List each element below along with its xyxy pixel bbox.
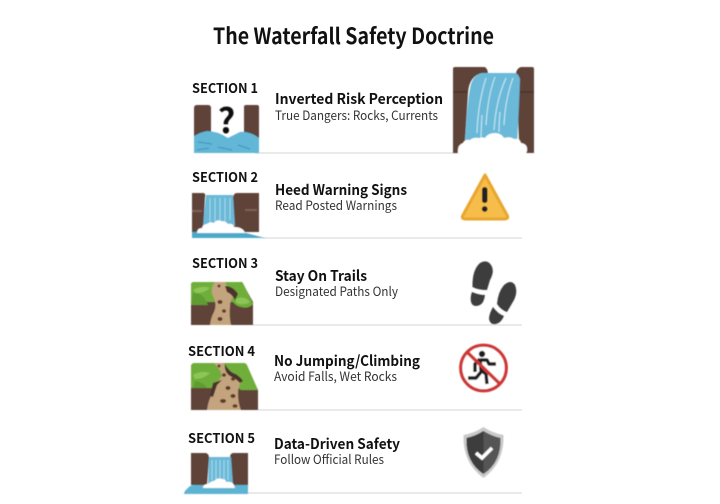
heading: No Jumping/Climbing — [274, 350, 420, 371]
description: Avoid Falls, Wet Rocks — [274, 366, 397, 385]
panel: section 5 — [184, 427, 522, 494]
description: Designated Paths Only — [275, 281, 398, 300]
icon: shield with check — [463, 427, 504, 478]
icon: small waterfall — [184, 453, 248, 494]
heading: Data-Driven Safety — [274, 433, 401, 454]
heading: Stay On Trails — [275, 265, 367, 286]
section 2 label: SECTION 2 — [192, 166, 258, 186]
description: Follow Official Rules — [274, 449, 384, 468]
heading: Inverted Risk Perception — [275, 88, 443, 109]
panel: section 1 — [192, 67, 534, 155]
icon: question mark over water: ? — [218, 94, 235, 143]
section 1 label: SECTION 1 — [192, 77, 258, 97]
icon: large waterfall — [453, 67, 534, 155]
heading: Heed Warning Signs — [275, 179, 407, 200]
icon: footprints — [471, 261, 516, 324]
section 5 label: SECTION 5 — [188, 427, 255, 447]
panel: section 2 — [192, 166, 522, 238]
title: The Waterfall Safety Doctrine — [213, 19, 494, 51]
icon: no running sign — [461, 345, 506, 391]
icon: waterfall — [192, 193, 265, 238]
icon: question mark over water — [194, 94, 259, 153]
icon: warning triangle — [462, 175, 508, 219]
panel: section 3 — [191, 252, 522, 325]
panel: section 4 — [188, 340, 522, 410]
section 3 label: SECTION 3 — [192, 252, 258, 272]
section 4 label: SECTION 4 — [188, 340, 255, 360]
icon: rocky trail — [191, 363, 258, 410]
description: True Dangers: Rocks, Currents — [275, 105, 438, 124]
icon: trail — [191, 282, 253, 325]
description: Read Posted Warnings — [275, 195, 397, 214]
